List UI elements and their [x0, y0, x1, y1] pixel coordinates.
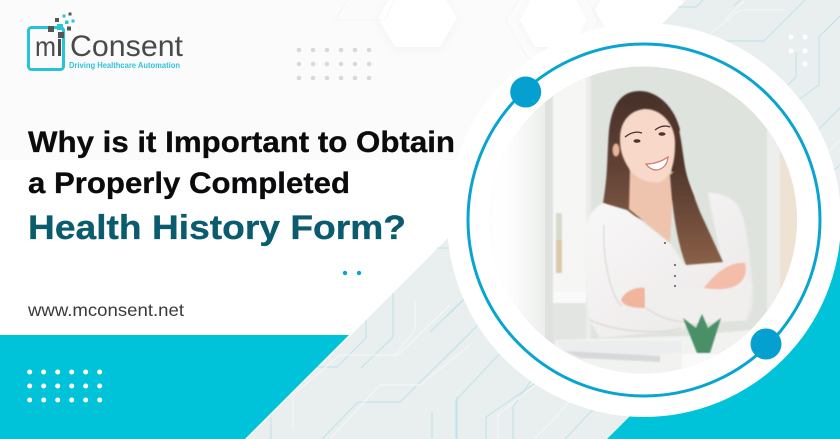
website url: www.mconsent.net — [27, 300, 184, 320]
cyan panel: bottom right — [607, 207, 840, 439]
logo letter i stem — [58, 39, 61, 56]
cyan panel: bottom left — [0, 335, 349, 439]
ring node: bottom right — [750, 328, 782, 360]
logo tagline: Driving Healthcare Automation — [69, 61, 180, 70]
faint circuit lines — [293, 0, 840, 439]
wall trim and wooden door — [767, 130, 797, 310]
keyboard — [565, 350, 660, 362]
hair strand over shirt — [670, 165, 723, 265]
logo wordmark: Consent — [70, 30, 184, 63]
circular ring — [468, 44, 820, 396]
cyan accent dots — [343, 271, 361, 275]
white dots: top right — [788, 34, 808, 66]
title line 3: Health History Form? — [28, 209, 406, 247]
grey dot grid — [297, 48, 371, 80]
hand on right — [704, 263, 746, 289]
logo — [28, 12, 184, 70]
ring node: top left — [510, 76, 541, 108]
shirt fold lines — [590, 225, 688, 332]
face — [620, 109, 675, 182]
crossed forearm — [644, 288, 732, 324]
shirt buttons — [664, 242, 676, 287]
background tint at top left — [0, 0, 686, 160]
white dot grid on cyan panel — [27, 370, 102, 402]
circuit lines — [271, 0, 840, 439]
hair behind shoulders — [603, 91, 680, 222]
desk — [555, 330, 750, 374]
eyes and brows — [625, 126, 670, 143]
logo tablet icon — [28, 28, 64, 70]
logo letter m: m — [35, 31, 56, 62]
white fade on left of photo — [490, 102, 545, 338]
smile — [646, 157, 668, 170]
white shirt — [584, 193, 753, 338]
photo: smiling woman at desk — [490, 66, 797, 374]
photo wall — [490, 66, 797, 374]
grey circuit panel — [247, 0, 840, 439]
title line 2: a Properly Completed — [28, 167, 350, 200]
hand on left — [621, 288, 645, 308]
background hexagons — [335, 0, 690, 58]
title — [28, 126, 455, 247]
title line 1: Why is it Important to Obtain — [28, 126, 455, 159]
window — [552, 76, 590, 338]
neck and chest — [629, 168, 674, 243]
logo pixels — [48, 12, 74, 38]
potted plant — [682, 314, 721, 372]
hair on right side of head — [670, 114, 695, 200]
white disc behind photo — [447, 23, 840, 417]
ear — [612, 144, 620, 156]
